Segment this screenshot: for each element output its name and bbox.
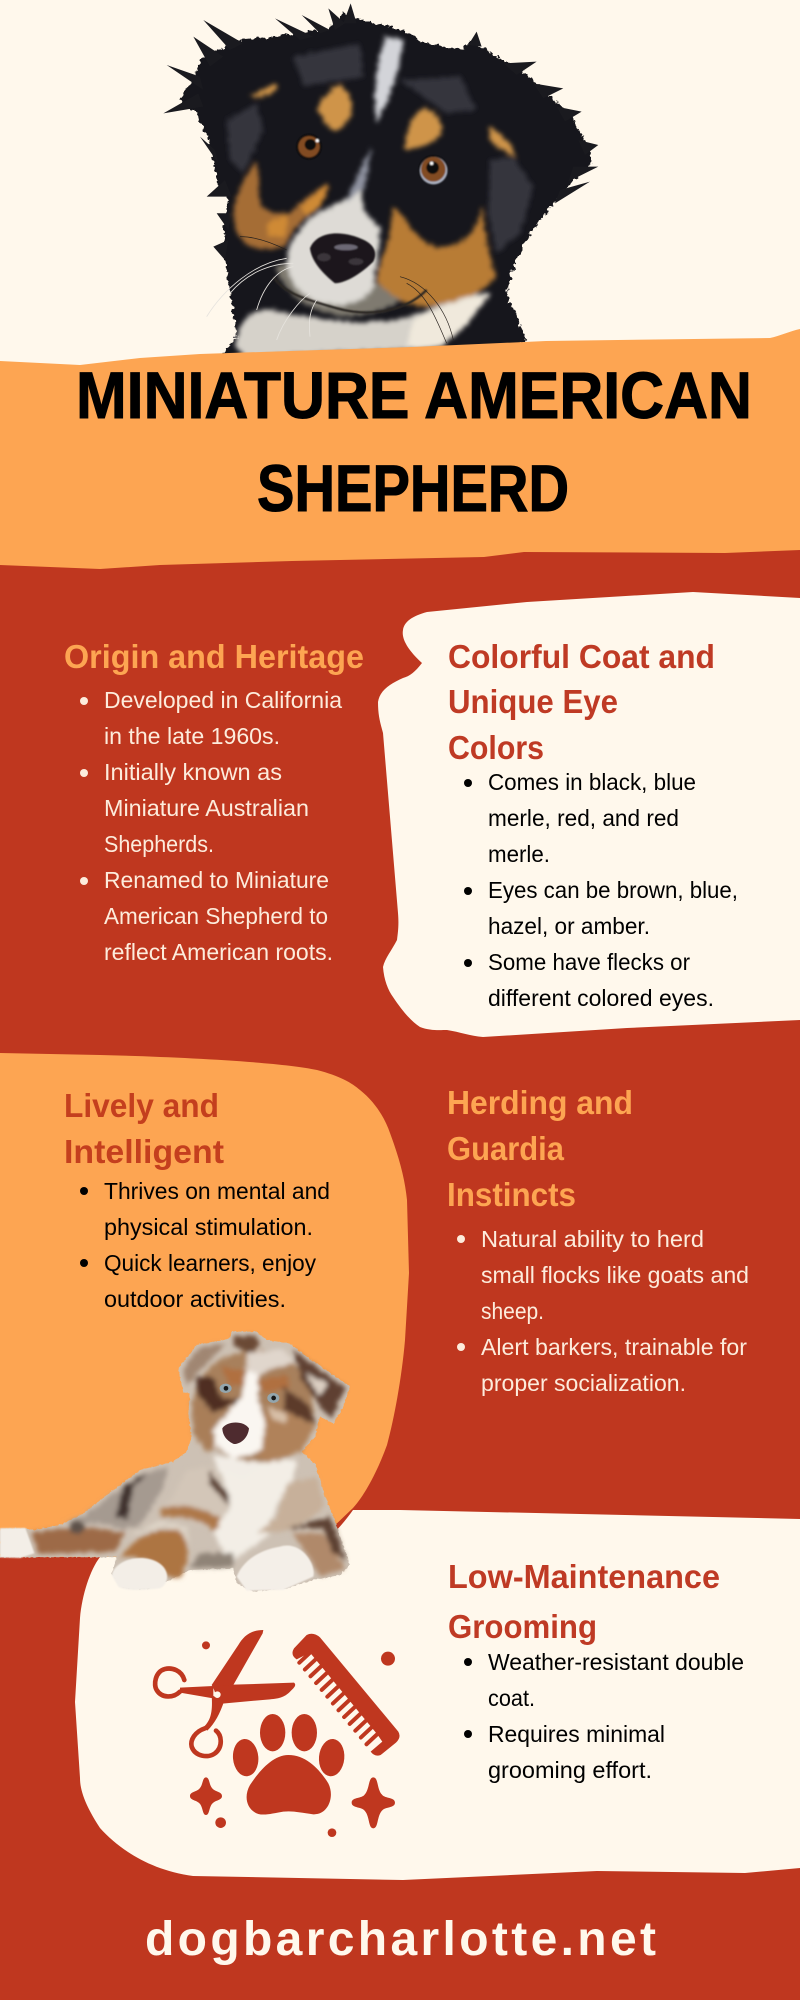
puppy paws: [112, 1545, 314, 1591]
bullet list: coat: different colored eyes.: [488, 985, 714, 1011]
body: [163, 1467, 230, 1533]
bullet list: grooming: Requires minimal: [488, 1721, 665, 1747]
icon: grooming tools and paw: [155, 1630, 400, 1837]
chest: [235, 293, 490, 358]
front leg: [128, 1520, 190, 1547]
right cheek tan: [377, 207, 497, 307]
red background section: [0, 540, 800, 2000]
bullet list: origin: in the late 1960s.: [104, 723, 280, 749]
footer: website: dogbarcharlotte.net: [145, 1913, 656, 1966]
bullet list: origin: Shepherds.: [104, 831, 214, 857]
title: SHEPHERD: [257, 451, 569, 525]
bullet list: coat: [464, 769, 738, 1011]
title: [76, 358, 752, 525]
bullet list: lively: Quick learners, enjoy: [104, 1250, 316, 1276]
heading: grooming: Grooming: [448, 1608, 597, 1645]
photo: black tricolor shepherd head: [163, 3, 598, 358]
banner: orange title band: [0, 329, 800, 569]
muzzle white: [287, 185, 380, 305]
puppy fur zones: [32, 1336, 347, 1578]
forehead blaze: [375, 37, 403, 123]
icon: paw print: [231, 1714, 346, 1815]
section: origin and heritage: [64, 638, 364, 965]
heading: lively: Intelligent: [64, 1133, 224, 1170]
heading: herding: [447, 1084, 633, 1213]
icon: comb: [292, 1634, 400, 1756]
fur colour zones: [227, 37, 533, 358]
bullet list: herding: Alert barkers, trainable for: [481, 1334, 747, 1360]
heading: herding: Instincts: [447, 1176, 576, 1213]
bullet list: coat: Some have flecks or: [488, 949, 690, 975]
section: coat and eye colors: [448, 638, 738, 1011]
bullet list: herding: sheep.: [481, 1298, 544, 1324]
bullet list: origin: Renamed to Miniature: [104, 867, 329, 893]
puppy tail tip: [0, 1528, 34, 1558]
head: [192, 1350, 313, 1462]
heading: lively: [64, 1087, 224, 1170]
heading: grooming: Low-Maintenance: [448, 1558, 720, 1595]
bullet list: origin: American Shepherd to: [104, 903, 328, 929]
puppy nose: [222, 1422, 249, 1444]
bullet list: grooming: [464, 1649, 744, 1783]
bullet list: origin: Initially known as: [104, 759, 282, 785]
bullet list: origin: Developed in California: [104, 687, 343, 713]
bullet list: grooming: coat.: [488, 1685, 535, 1711]
bullet list: lively: Thrives on mental and: [104, 1178, 330, 1204]
bullet list: origin: reflect American roots.: [104, 939, 333, 965]
bullet list: grooming: Weather-resistant double: [488, 1649, 744, 1675]
bullet list: coat: merle, red, and red: [488, 805, 679, 831]
heading: coat and eyes: [448, 638, 715, 766]
bullet list: coat: merle.: [488, 841, 550, 867]
title: MINIATURE AMERICAN: [76, 358, 752, 432]
heading: origin and heritage: Origin and Heritage: [64, 638, 364, 675]
bullet list: lively: outdoor activities.: [104, 1286, 286, 1312]
snout stripe: [345, 147, 372, 203]
puppy eyes: [220, 1384, 279, 1403]
eyes: [296, 134, 448, 185]
bullet list: lively: physical stimulation.: [104, 1214, 313, 1240]
rear leg: [32, 1528, 125, 1554]
section: low-maintenance grooming: [448, 1558, 744, 1783]
panel: grooming cream shape: [75, 1510, 800, 1880]
bullet list: origin: Miniature Australian: [104, 795, 309, 821]
panel: coat cream shape: [378, 592, 800, 1037]
heading: herding: Herding and: [447, 1084, 633, 1121]
nose: [310, 233, 375, 283]
bullet list: coat: hazel, or amber.: [488, 913, 650, 939]
heading: grooming: [448, 1558, 720, 1645]
icon: scissors: [155, 1630, 295, 1756]
bullet list: origin: [80, 687, 343, 965]
heading: coat and eyes: Colorful Coat and: [448, 638, 715, 675]
panel: temperament orange shape: [0, 1053, 409, 1557]
fur tufts: [163, 3, 598, 260]
photo: merle puppy lying down: [0, 1332, 350, 1592]
mouth and whiskers: [207, 237, 453, 343]
section: herding instincts: [447, 1084, 749, 1396]
ear sheen: [227, 43, 533, 253]
bullet list: herding: [457, 1226, 749, 1396]
heading: lively: Lively and: [64, 1087, 219, 1124]
icon: sparkles and dots: [190, 1641, 395, 1837]
section: lively and intelligent: [64, 1087, 330, 1312]
bullet list: coat: Eyes can be brown, blue,: [488, 877, 738, 903]
heading: coat and eyes: Unique Eye: [448, 683, 618, 720]
bullet list: herding: small flocks like goats and: [481, 1262, 749, 1288]
tan brows: [250, 83, 517, 157]
heading: herding: Guardia: [447, 1130, 565, 1167]
heading: coat and eyes: Colors: [448, 729, 544, 766]
lower muzzle: [275, 260, 400, 316]
bullet list: herding: proper socialization.: [481, 1370, 686, 1396]
bullet list: lively: [80, 1178, 330, 1312]
left cheek tan: [234, 160, 328, 249]
bullet list: herding: Natural ability to herd: [481, 1226, 704, 1252]
bullet list: coat: Comes in black, blue: [488, 769, 696, 795]
bullet list: grooming: grooming effort.: [488, 1757, 652, 1783]
